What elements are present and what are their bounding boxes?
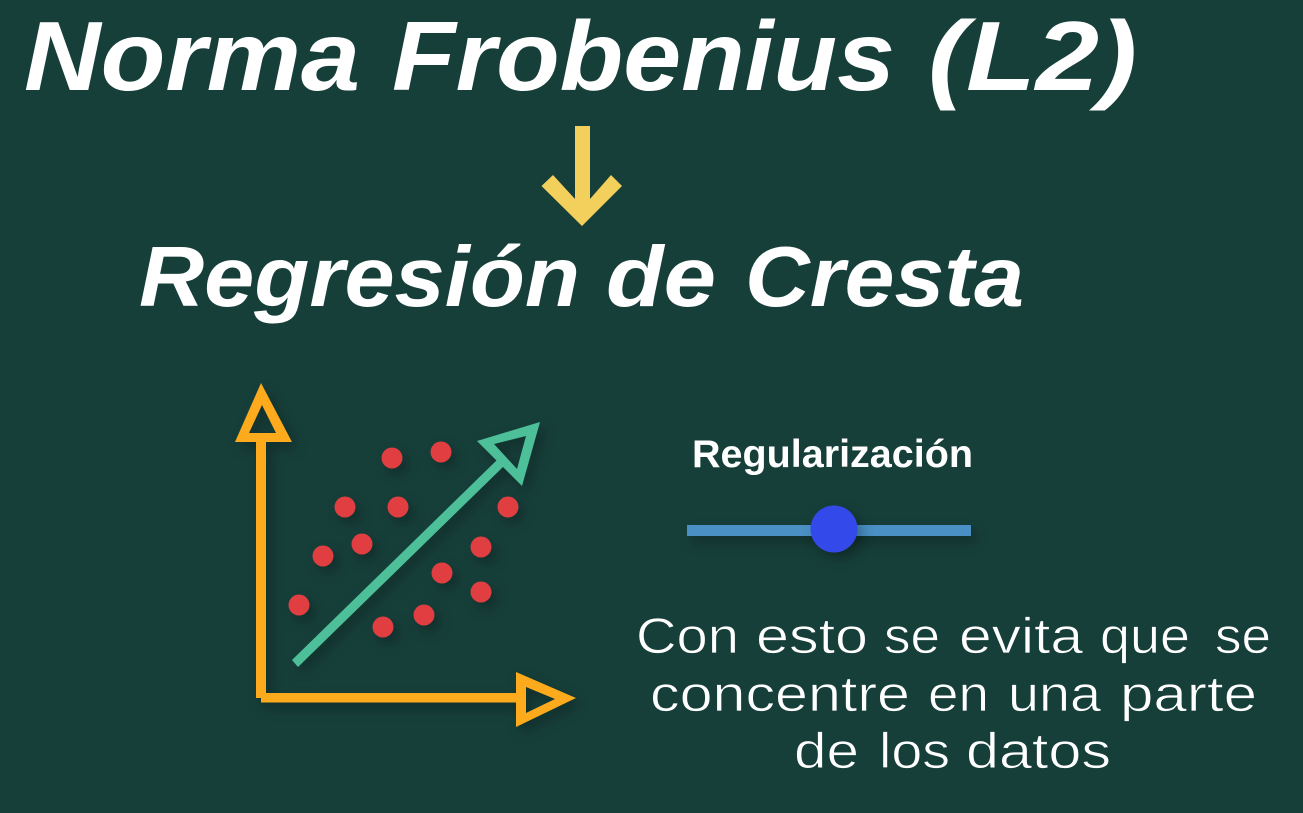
subtitle: de	[606, 230, 716, 325]
explanation text	[636, 608, 1271, 779]
title: (L2)	[928, 1, 1137, 111]
explanation text: evita	[959, 608, 1083, 664]
title	[24, 1, 1137, 111]
subtitle	[139, 230, 1024, 325]
regularization label: Regularización	[692, 433, 973, 476]
explanation text: se	[1215, 608, 1271, 664]
title: Frobenius	[392, 1, 895, 111]
explanation text: de	[794, 723, 859, 779]
title: Norma	[24, 1, 360, 111]
explanation text: Con	[636, 608, 739, 664]
regularization slider	[687, 506, 971, 552]
explanation text: parte	[1120, 666, 1257, 722]
icon: yellow down arrow	[542, 126, 622, 226]
slider track	[687, 525, 971, 536]
explanation text: esto	[756, 608, 868, 664]
green regression arrow	[292, 422, 540, 667]
explanation text: se	[884, 608, 940, 664]
explanation text: datos	[966, 723, 1111, 779]
explanation text: concentre	[650, 666, 910, 722]
orange axes	[235, 383, 576, 727]
red data points	[288, 442, 518, 638]
explanation text: los	[879, 723, 950, 779]
explanation text: en	[928, 666, 989, 722]
explanation text: que	[1100, 608, 1190, 664]
subtitle: Cresta	[745, 230, 1024, 325]
subtitle: Regresión	[139, 230, 580, 325]
slider knob	[810, 506, 858, 552]
scatter plot with regression arrow	[235, 383, 576, 727]
explanation text: una	[1008, 666, 1101, 722]
